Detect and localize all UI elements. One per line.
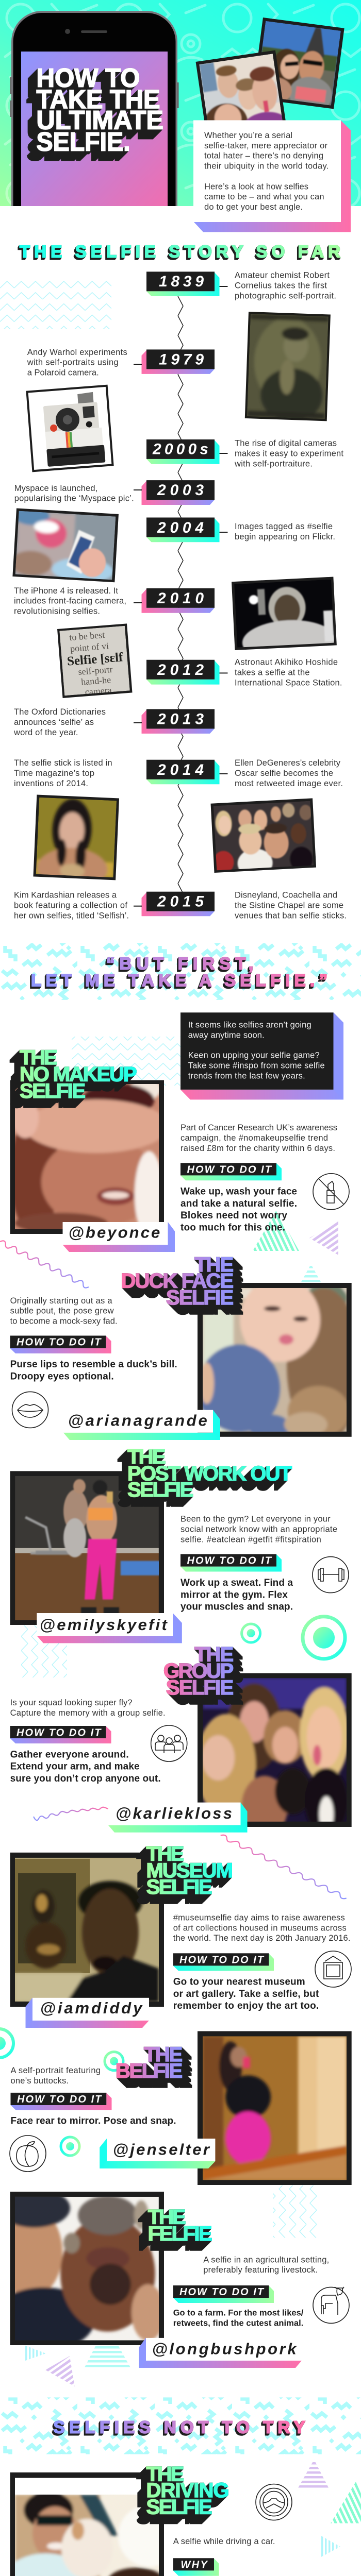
how to do it badge [173,2285,274,2303]
timeline entry 2010: 2010 [157,590,204,607]
photo: group of friends [195,50,291,151]
how to do it badge: HOW TO DO IT [187,1164,272,1175]
timeline entry 1979 [27,348,215,378]
icon: steering wheel [256,2484,292,2520]
instructions: sure you don’t crop anyone out. [10,1773,161,1784]
photo: dictionary entry: hand-he [80,674,111,687]
instructions [173,1976,319,2011]
handle tag: @beyonce [69,1224,160,1242]
heading: the driving selfie: DRIVING [146,2479,229,2502]
description: to become a mock-sexy fad. [10,1317,118,1326]
handle tag [63,1222,175,1252]
intro copy: Whether you’re a serial [204,131,292,140]
heading: the duck face selfie: SELFIE [166,1286,234,1309]
instructions: mirror at the gym. Flex [180,1589,288,1600]
decorative target circle [105,2052,123,2071]
how to do it badge [180,1554,282,1571]
handle tag [26,1998,149,2028]
timeline entry 2013 [13,707,215,737]
instructions: Gather everyone around. [10,1749,129,1760]
quote band [0,943,361,1000]
heading: the driving selfie: THE [146,2463,184,2485]
heading: the duck face selfie: THE [194,1253,234,1276]
decorative triangles [24,2345,131,2386]
instructions [180,1186,297,1233]
instructions: Go to your nearest museum [173,1976,305,1988]
heading: the no makeup selfie [20,1046,137,1103]
heading: the driving selfie [146,2463,229,2519]
timeline entry 2015: venues that ban selfie sticks. [235,911,347,920]
timeline entry 2003: popularising the ‘Myspace pic’. [14,494,134,503]
photo: david peraza [0,2472,180,2576]
heading: the group selfie: SELFIE [166,1676,234,1699]
handle tag: @longbushpork [152,2340,297,2358]
description: #museumselfie day aims to raise awareness [173,1913,345,1922]
hero banner [0,0,361,240]
photo: dictionary entry: Selfie [sɛlf [67,650,124,669]
timeline entry 2012 [146,658,342,687]
card: no makeup selfie [10,1046,349,1252]
quote heading: LET ME TAKE A SELFIE.” [31,971,327,990]
heading: the felfie [148,2206,212,2245]
timeline entry 1979: a Polaroid camera. [27,368,99,378]
timeline entry 2012: 2012 [157,662,204,679]
quote heading [31,954,327,990]
description [173,1913,351,1943]
heading: the driving selfie: SELFIE [146,2496,212,2519]
title: SELFIE. [36,127,130,157]
timeline entry 2003: 2003 [157,482,204,499]
description: preferably featuring livestock. [203,2265,318,2275]
timeline entry 2004: Images tagged as #selfie [235,522,333,531]
timeline entry 2013: announces ‘selfie’ as [14,718,94,727]
timeline entry 2015: 2015 [157,893,204,910]
description: Originally starting out as a [10,1296,112,1306]
handle tag [139,2338,302,2368]
photo: beyonce [10,1078,169,1239]
intro copy: came to be – and what you can [204,192,324,201]
photo: emily skye [10,1471,164,1625]
timeline entry 2014: inventions of 2014. [14,779,88,788]
timeline spine [177,296,184,892]
decorative triangle [301,1264,321,1283]
timeline entry 2014: Ellen DeGeneres’s celebrity [235,758,341,768]
photo: man with pig [0,2189,165,2351]
timeline entry 1839 [146,271,336,300]
heading: the duck face selfie [121,1253,234,1309]
instructions: Droopy eyes optional. [10,1371,114,1382]
icon: lips [12,1392,48,1428]
heading: the felfie: FELFIE [148,2223,212,2245]
instructions: your muscles and snap. [180,1602,293,1613]
card: museum selfie [10,1842,351,2028]
intro copy: their ubiquity in the world today. [204,162,329,171]
timeline entry 2014: most retweeted image ever. [235,779,343,788]
timeline entry 2015: Kim Kardashian releases a [14,891,117,900]
description: Part of Cancer Research UK’s awareness [180,1123,337,1132]
description: the world. The next day is 20th January 2016. [173,1934,351,1943]
description [180,1515,337,1545]
intro copy: selfie-taker, mere appreciator or [204,141,328,150]
instructions: retweets, find the cutest animal. [173,2318,303,2328]
intro dark box [180,1012,343,1099]
photo: couple at the Eiffel Tower [252,18,344,115]
how to do it badge: HOW TO DO IT [17,1337,102,1348]
heading: the duck face selfie: DUCK FACE [121,1269,234,1292]
timeline entry 2015: Disneyland, Coachella and [235,891,337,900]
timeline entry 2014 [14,758,343,788]
photo: diddy and the Mona Lisa [10,1853,164,2007]
description [10,1296,118,1326]
intro copy [204,131,329,212]
timeline entry 2015: her own selfies, titled ‘Selfish’. [14,911,129,920]
handle tag: @karliekloss [116,1804,232,1822]
description: raised £8m for the charity within 6 days. [180,1144,335,1153]
instructions: or art gallery. Take a selfie, but [173,1989,319,1999]
card: post work out selfie [10,1446,349,1677]
card: the felfie [0,2189,349,2386]
instructions: and take a natural selfie. [180,1198,297,1209]
heading: the group selfie [163,1643,234,1699]
title: HOW TO [36,63,140,93]
photo: iPhone 4 [10,505,119,585]
intro text box [193,120,351,232]
title: ULTIMATE [36,106,163,135]
timeline entry 1979: 1979 [159,351,204,368]
instructions: Purse lips to resemble a duck’s bill. [10,1359,177,1370]
photo: dictionary entry: camera [85,685,112,697]
timeline entry 2013: 2013 [157,711,204,727]
title: TAKE THE [36,84,160,114]
heading: the belfie: THE [144,2043,183,2066]
instructions: Work up a sweat. Find a [180,1578,293,1588]
timeline entry 2014: Oscar selfie becomes the [235,769,333,778]
instructions [173,2309,304,2328]
photo: Robert Cornelius [245,312,331,423]
handle tag [100,2139,215,2168]
description: subtle pout, the pose grew [10,1307,114,1316]
timeline entry 1839: 1839 [159,273,204,290]
intro dark box: It seems like selfies aren’t going [188,1020,311,1029]
description [10,1698,166,1718]
instructions: Face rear to mirror. Pose and snap. [10,2116,176,2127]
heading: the museum selfie: THE [146,1842,184,1865]
timeline entry 2010: revolutionising selfies. [14,607,100,616]
how to do it badge [180,1163,282,1180]
timeline entry 2010: includes front-facing camera, [14,597,126,606]
instructions [180,1578,293,1613]
intro copy: Here’s a look at how selfies [204,182,308,191]
instructions: Blokes need not worry [180,1210,287,1221]
description [180,1123,337,1153]
description: campaign, the #nomakeupselfie trend [180,1133,328,1143]
decorative target circle [0,2029,13,2058]
description: A selfie in an agricultural setting, [203,2255,329,2264]
instructions: remember to enjoy the art too. [173,2001,319,2011]
heading: the museum selfie: SELFIE [146,1876,212,1899]
timeline entry 2013: The Oxford Dictionaries [14,707,106,717]
how to do it badge [173,1953,274,1971]
how to do it badge [10,1335,111,1353]
decorative target circle [61,2137,79,2156]
timeline entry 2004: begin appearing on Flickr. [235,532,335,541]
timeline entry 2014: The selfie stick is listed in [14,758,112,768]
intro dark box: trends from the last few years. [188,1072,305,1081]
how to do it badge: HOW TO DO IT [17,1727,102,1738]
handle tag [108,1803,248,1833]
icon: peach [10,2136,46,2172]
decorative squiggle [34,1807,109,1820]
instructions [10,1359,177,1382]
heading: selfies not to try: SELFIES NOT TO TRY [54,2417,305,2436]
how to do it badge: HOW TO DO IT [17,2094,102,2105]
description [10,2066,101,2086]
heading: the museum selfie: MUSEUM [146,1859,233,1882]
how to do it badge: HOW TO DO IT [179,1955,265,1966]
description: social network know with an appropriate [180,1525,337,1534]
photo: dictionary entry [57,623,133,699]
timeline entry 2004 [146,517,335,542]
handle tag: @arianagrande [68,1411,207,1429]
description: selfie. #eatclean #getfit #fitspiration [180,1535,321,1545]
icon: cow [313,2287,349,2323]
handle tag: @jenselter [113,2140,210,2158]
timeline entry 2000s: makes it easy to experiment [235,449,343,459]
timeline entry 2014: Time magazine’s top [14,769,94,778]
heading: the group selfie: THE [194,1643,234,1666]
photo: dictionary entry: to be best [69,630,105,642]
heading: the selfie story so far: THE SELFIE STORY SO FAR [20,242,340,261]
timeline entry 2003 [14,480,215,505]
photo: Oscar selfie [210,798,317,880]
instructions: Go to a farm. For the most likes/ [173,2309,304,2318]
photo: dictionary entry: self-portr [78,664,113,677]
handle tag: @iamdiddy [40,1999,143,2017]
heading: the belfie: BELFIE [116,2060,183,2082]
timeline entry 2012: International Space Station. [235,678,342,687]
decorative vertical zigzag [21,1625,67,1677]
timeline entry 2014: 2014 [157,761,204,778]
timeline entry 2012: takes a selfie at the [235,668,309,677]
intro copy: total hater – there’s no denying [204,151,323,161]
hero background [0,0,361,206]
heading: the post work out selfie: THE [127,1446,166,1468]
phone with title [10,11,178,240]
card: the belfie [10,2031,352,2185]
timeline entry 2010 [14,586,215,616]
timeline entry 2015: the Sistine Chapel are some [235,901,343,910]
timeline entry 2003: Myspace is launched, [14,484,97,493]
timeline entry 2004: 2004 [157,519,204,536]
description: one’s buttocks. [10,2076,69,2086]
why badge: WHY [180,2559,208,2570]
timeline entry 1979: with self-portraits using [27,358,119,367]
intro dark box: Keen on upping your selfie game? [188,1051,320,1060]
photo: jen selter [198,2031,352,2185]
icon: framed picture [315,1951,351,1987]
decorative triangles [253,1210,338,1255]
heading: the post work out selfie: SELFIE [127,1479,193,1501]
description [203,2255,329,2275]
intro dark box: away anytime soon. [188,1030,265,1040]
handle tag: @emilyskyefit [40,1616,168,1634]
description: Is your squad looking super fly? [10,1698,133,1707]
icon: group of people [151,1725,187,1761]
heading: the belfie [116,2043,183,2082]
timeline entry 2000s: The rise of digital cameras [235,439,337,448]
quote heading: “BUT FIRST, [106,954,253,973]
photo: dictionary entry: point of vi [70,640,109,654]
timeline entry 2010: The iPhone 4 is released. It [14,586,118,596]
photo: group at party [196,1673,352,1838]
timeline entry 1839: Cornelius takes the first [235,281,327,290]
intro dark box: Take some #inspo from some selfie [188,1061,325,1071]
timeline entry 1839: Amateur chemist Robert [235,271,330,280]
photo: Kim Kardashian [33,794,119,891]
how to do it badge: HOW TO DO IT [179,2286,265,2298]
icon: dumbbell [313,1557,349,1593]
title [36,63,163,157]
description: Been to the gym? Let everyone in your [180,1515,331,1524]
timeline entry 1839: photographic self-portrait. [235,291,336,300]
not to try band [0,2397,361,2454]
handle tag [63,1410,220,1440]
timeline entry 2000s: 2000s [152,441,208,457]
heading: the post work out selfie [127,1446,292,1501]
heading: the no makeup selfie: NO MAKEUP [20,1063,137,1086]
timeline entry 2000s [146,439,343,468]
timeline entry 2012: Astronaut Akihiko Hoshide [235,658,338,667]
timeline entry 2013: word of the year. [13,728,78,737]
heading: the no makeup selfie: THE [20,1046,58,1069]
heading: the museum selfie [146,1842,233,1899]
heading: the no makeup selfie: SELFIE [20,1080,86,1103]
intro copy: do to get your best angle. [204,202,303,212]
description: A selfie while driving a car. [173,2537,275,2546]
decorative zigzag [72,1037,180,1086]
decorative squiggle [221,1835,347,1899]
icon: crossed-out lipstick [313,1174,349,1210]
decorative vertical zigzag [273,2185,319,2238]
decorative triangles [297,2460,361,2557]
how to do it badge: HOW TO DO IT [187,1555,272,1567]
instructions [10,1749,161,1784]
how to do it badge [10,2093,111,2110]
timeline entry 2015: book featuring a collection of [14,901,127,910]
card: duck face selfie [10,1253,361,1443]
how to do it badge [10,1726,111,1743]
timeline entry 1979: Andy Warhol experiments [27,348,127,357]
card: group selfie [10,1643,352,1838]
description: A self-portrait featuring [10,2066,101,2075]
decorative target circles [242,1617,345,1659]
handle tag [37,1613,182,1643]
instructions: too much for this one. [180,1222,285,1233]
photo: astronaut [232,577,337,664]
description: of art collections housed in museums across [173,1923,347,1933]
card: driving selfie [0,2463,325,2576]
decorative squiggle [0,1241,89,1288]
heading: the group selfie: GROUP [163,1659,234,1682]
heading: the felfie: THE [148,2206,186,2229]
why badge [173,2558,219,2576]
timeline entry 2015 [14,891,347,920]
photo: polaroid camera [26,385,114,472]
photo: ariana grande [198,1278,361,1443]
timeline entry 2000s: with self-portraiture. [234,459,313,468]
description: Capture the memory with a group selfie. [10,1708,166,1718]
heading: the post work out selfie: POST WORK OUT [127,1462,292,1485]
instructions: Extend your arm, and make [10,1761,140,1772]
instructions: Wake up, wash your face [180,1186,297,1197]
decorative zigzag [0,278,111,329]
